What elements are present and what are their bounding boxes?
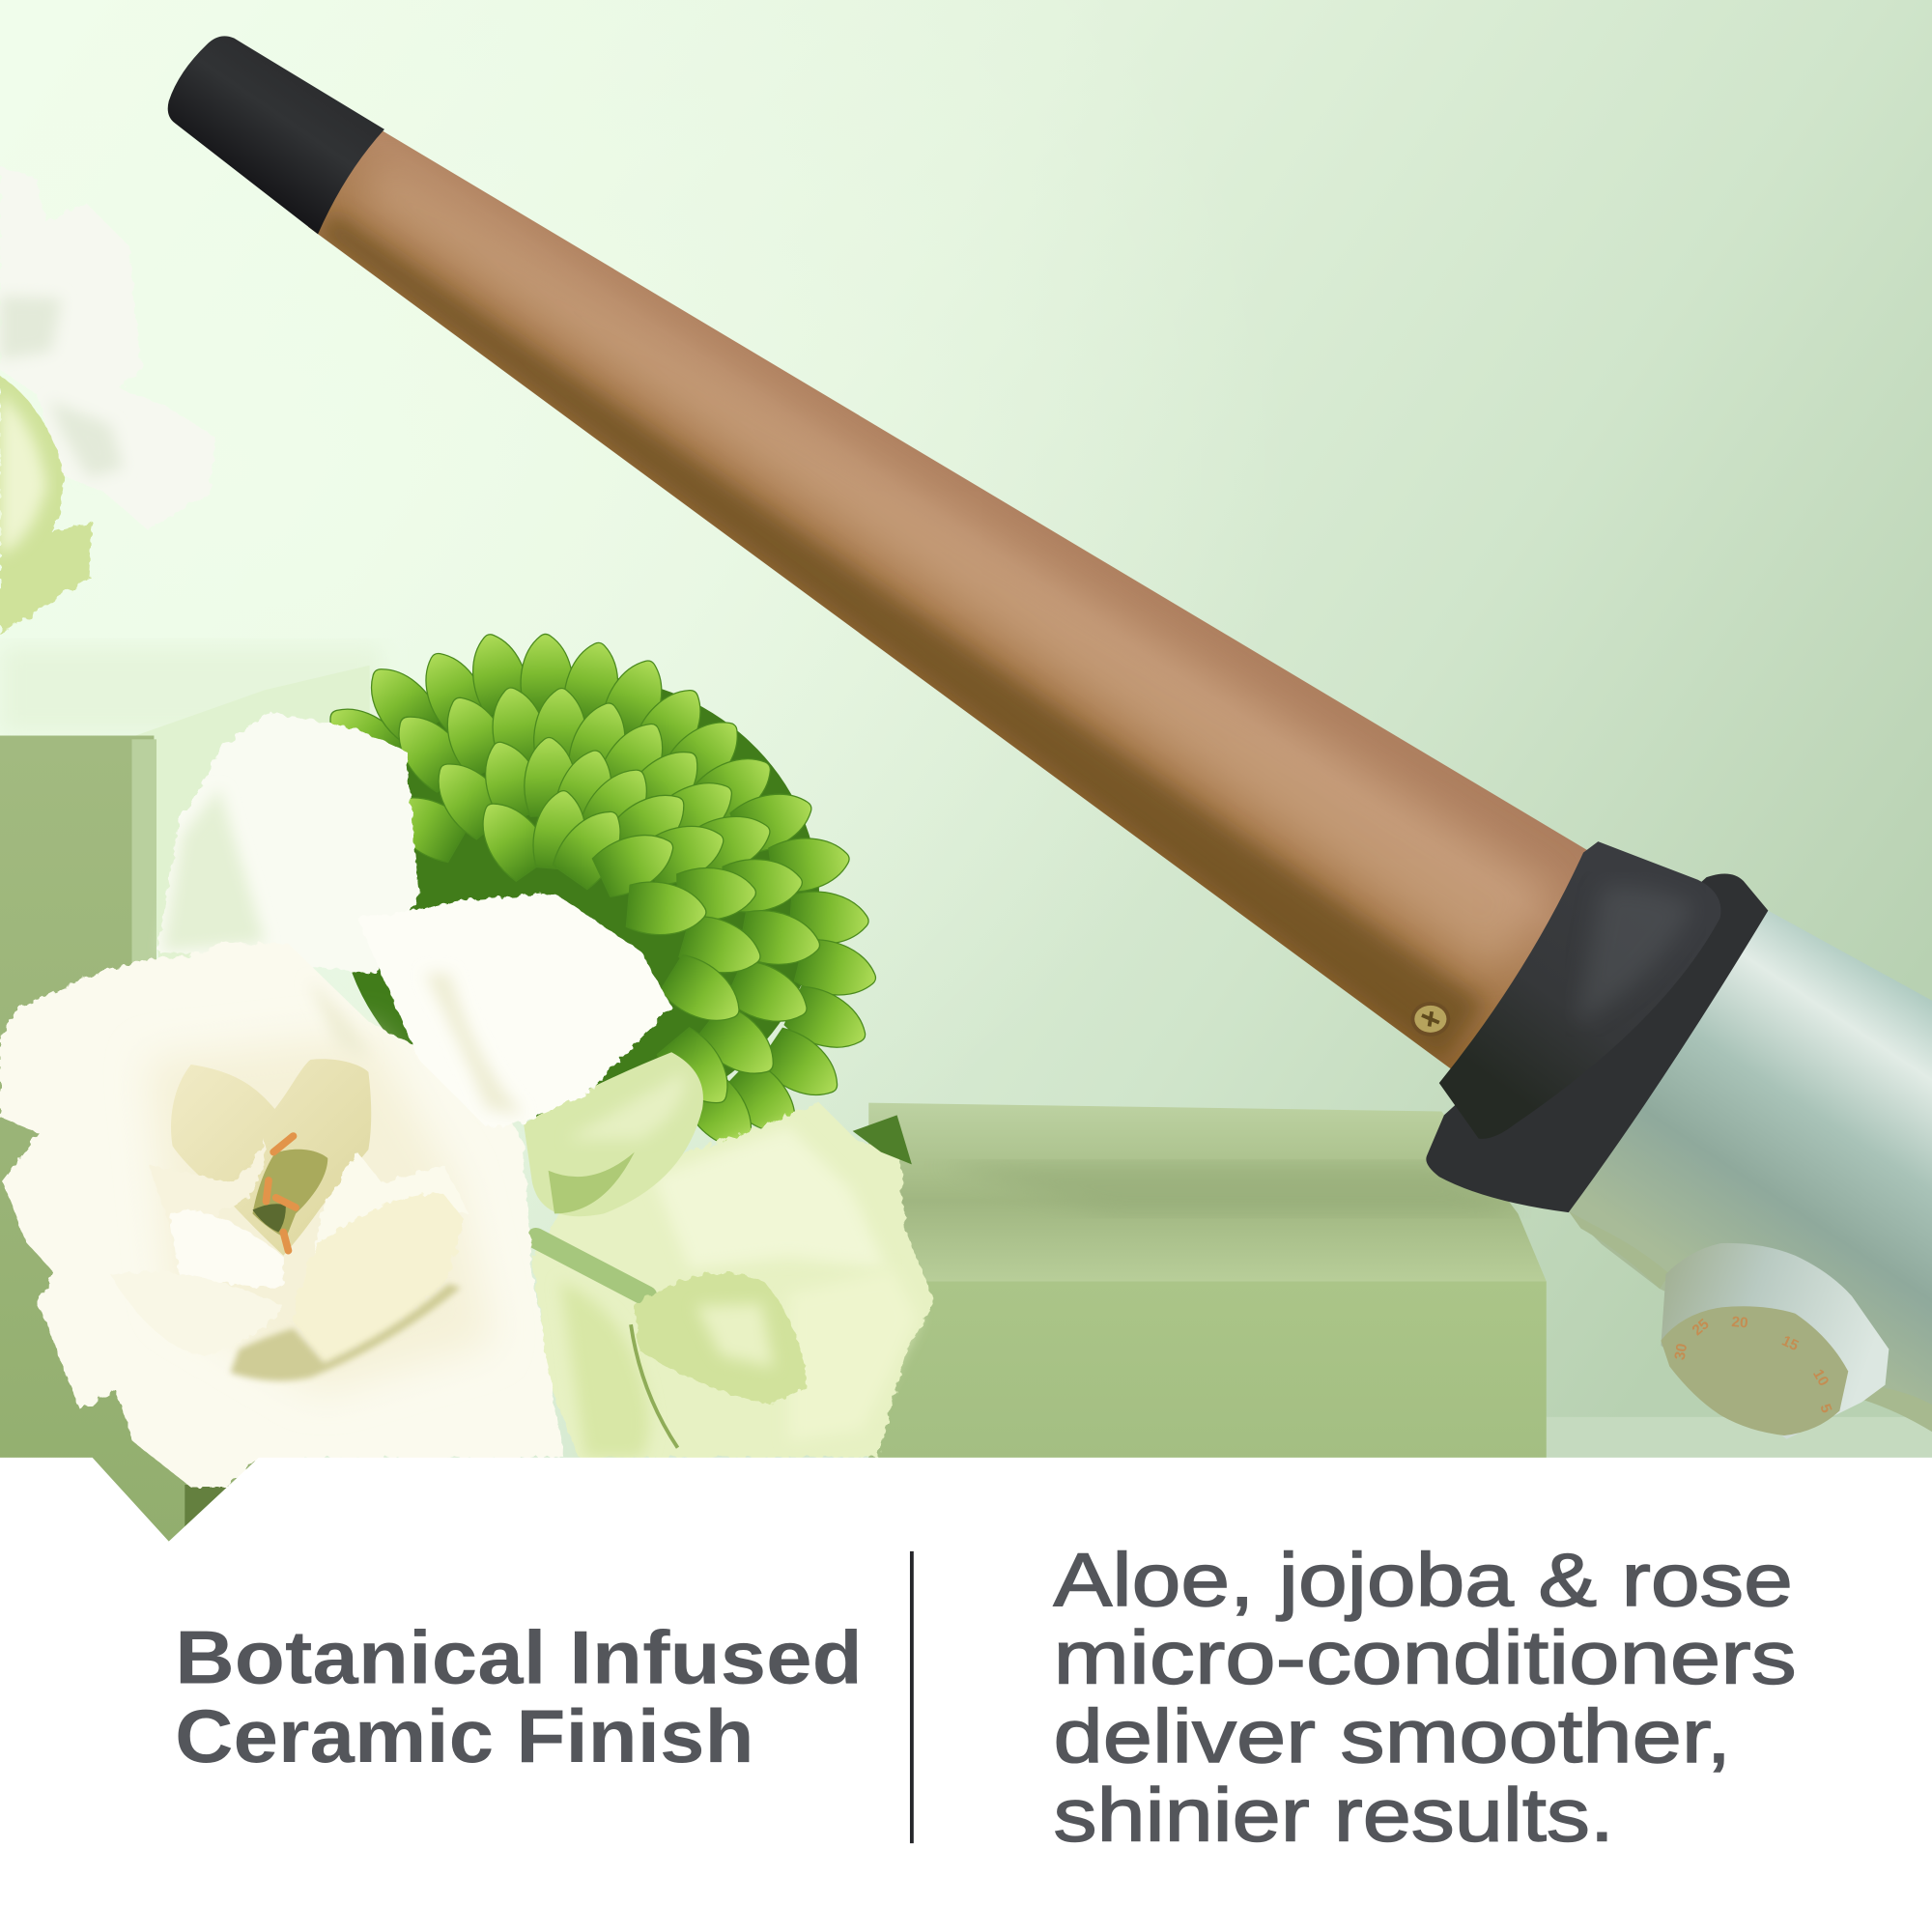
wand handle [1569, 911, 1932, 1430]
caption heading: Ceramic Finish [175, 1695, 754, 1778]
caption description: deliver smoother, [1054, 1695, 1731, 1778]
white caption panel with notch [0, 1458, 1932, 1932]
back petal shade [162, 788, 265, 952]
caption heading: Botanical Infused [175, 1616, 863, 1699]
caption description: Aloe, jojoba & rose [1054, 1539, 1793, 1622]
caption heading [175, 1616, 863, 1778]
lower right pale green flower [532, 1103, 934, 1458]
barrel highlight [359, 162, 1555, 976]
wand black tip [168, 36, 384, 234]
dial base [1661, 1243, 1889, 1439]
main ruffled bloom [0, 943, 564, 1488]
cream folded petal [294, 1194, 464, 1361]
right petal [357, 894, 671, 1127]
collar inner cowl [1439, 841, 1720, 1139]
bloom cream shading [148, 1035, 493, 1392]
dial numbers: 30 [1672, 1342, 1690, 1361]
flower throat [171, 1059, 371, 1256]
flower stem [536, 1238, 647, 1296]
dial face [1661, 1306, 1848, 1435]
petals [315, 628, 882, 1162]
green chrysanthemum [315, 628, 882, 1162]
collar highlight [1577, 886, 1694, 1023]
blurred pale rear block [0, 647, 382, 733]
collar outer ring [1426, 873, 1768, 1212]
top-left pale green flower [0, 376, 93, 635]
large white flower [0, 712, 671, 1488]
dial numbers: 10 [1809, 1367, 1832, 1389]
dial numbers: 15 [1779, 1333, 1802, 1354]
lower flower bud [631, 1273, 807, 1448]
left green block [0, 666, 370, 1552]
wand ceramic barrel [308, 131, 1587, 1068]
dial numbers: 25 [1690, 1316, 1713, 1339]
caption description [1054, 1539, 1797, 1858]
vertical divider [910, 1551, 914, 1843]
top-left white flower [0, 166, 215, 529]
dial numbers: 20 [1731, 1314, 1748, 1331]
flower centre [252, 1150, 327, 1238]
barrel shadow edge [318, 212, 1485, 1062]
caption description: micro-conditioners [1054, 1616, 1797, 1699]
orange stamens [267, 1136, 296, 1251]
petal fold shading [308, 974, 524, 1115]
upper flower bud [524, 1052, 703, 1216]
curling wand [168, 36, 1932, 1439]
caption description: shinier results. [1054, 1775, 1614, 1858]
inner frilled petals [148, 1140, 266, 1233]
dial numbers [1672, 1314, 1834, 1415]
barrel screw [1410, 1002, 1450, 1037]
dial numbers: 5 [1816, 1402, 1834, 1415]
petal shadow band [231, 1284, 461, 1380]
handle lower stem [1569, 1211, 1932, 1432]
right green block [868, 1103, 1547, 1466]
back petal [157, 712, 419, 974]
temperature dial [1661, 1243, 1889, 1439]
